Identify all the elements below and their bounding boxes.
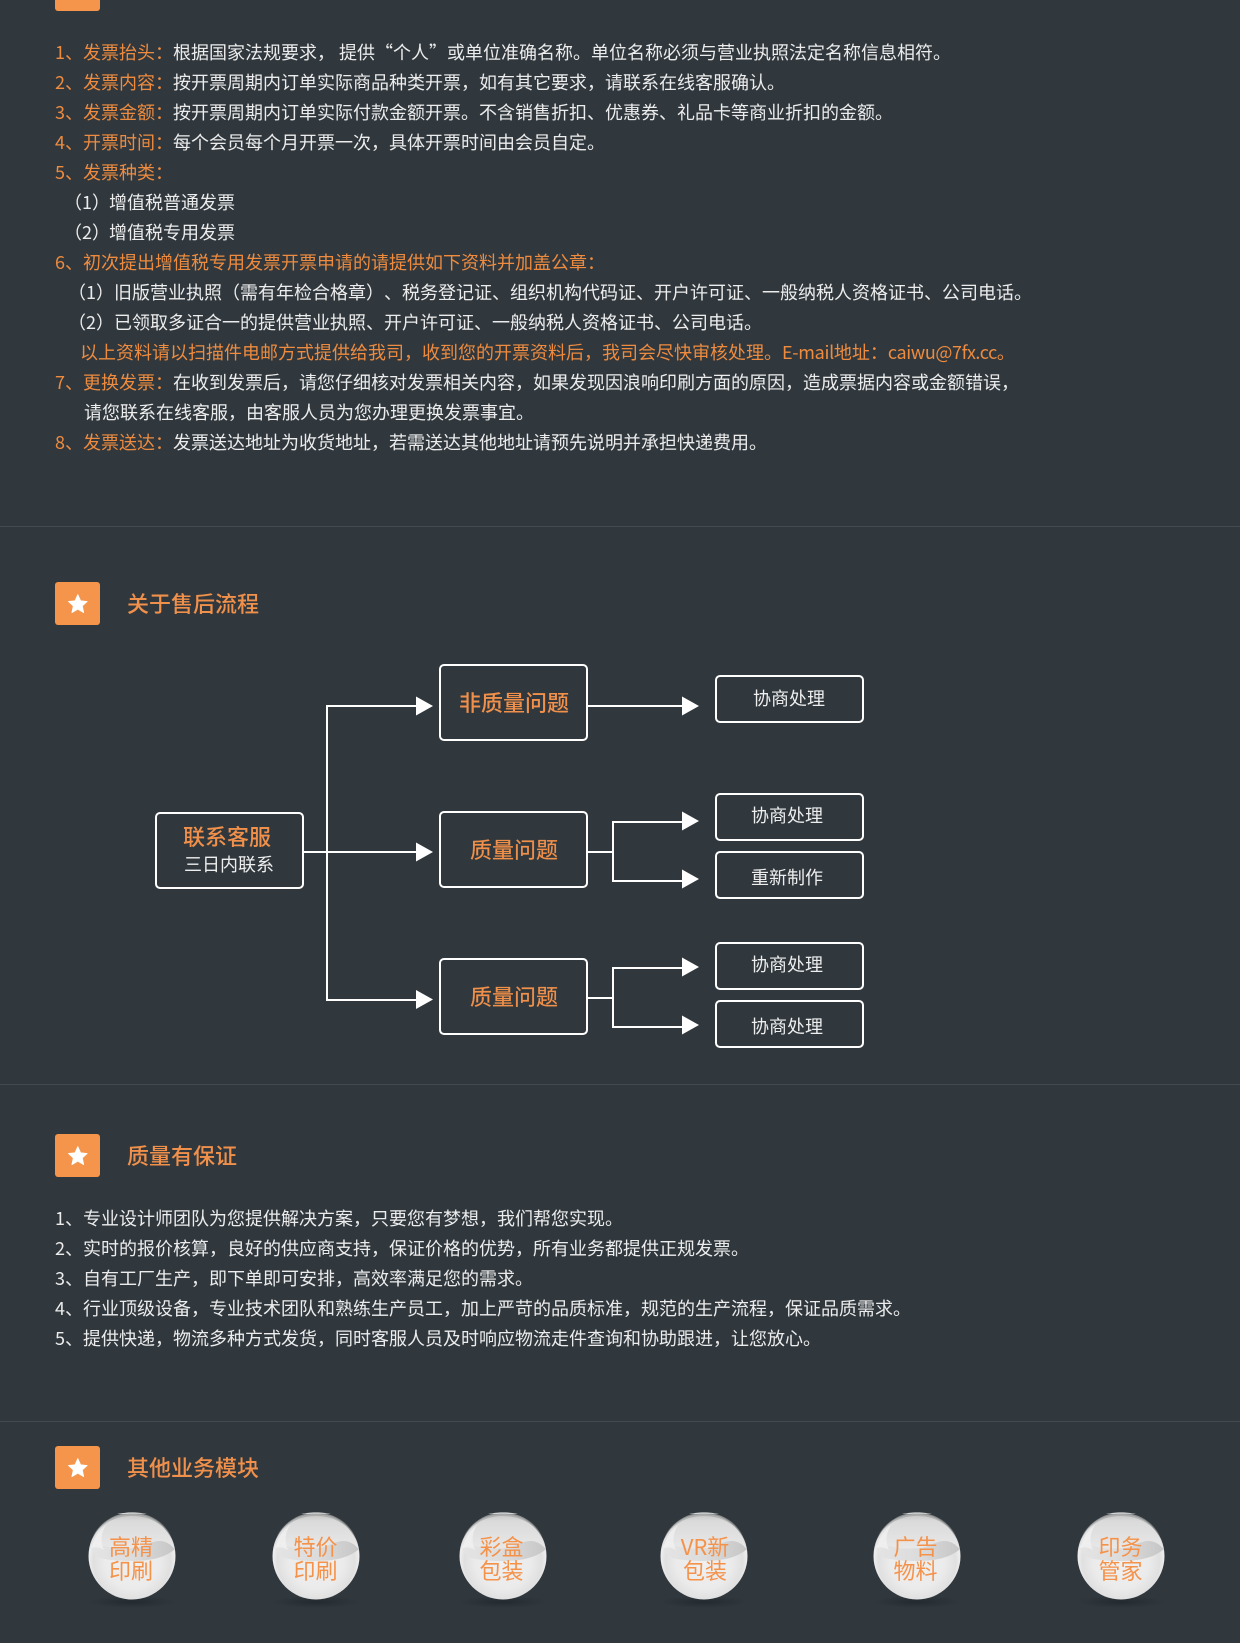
flow box: contact service <box>156 813 303 888</box>
arrow: non-quality to negotiate <box>588 696 699 716</box>
flow box: negotiate a <box>716 676 863 722</box>
icon: sphere high-precision printing <box>88 1512 176 1604</box>
text: guarantee 2: 2、实时的报价核算，良好的供应商支持，保证价格的优势，所有业务都提供正规发票。 <box>55 1235 749 1261</box>
icon: star badge <box>55 1134 100 1177</box>
flowchart: after-sales <box>155 664 864 1048</box>
text: invoice line 3: 3、发票金额：按开票周期内订单实际付款金额开票。不含销售折扣、优惠券、礼品卡等商业折扣的金额。 <box>55 99 893 125</box>
icon: sphere advertising materials: 广告 <box>893 1530 938 1562</box>
icon: sphere colour box packaging <box>460 1512 546 1604</box>
text: guarantee 4: 4、行业顶级设备，专业技术团队和熟练生产员工，加上严苛的品质标准，规范的生产流程，保证品质需求。 <box>55 1295 911 1321</box>
flow box: negotiate a: 协商处理 <box>753 685 825 711</box>
flow box: negotiate b: 协商处理 <box>751 802 823 828</box>
flow box: contact service: 联系客服 <box>183 820 271 852</box>
text: guarantee 3: 3、自有工厂生产，即下单即可安排，高效率满足您的需求。 <box>55 1265 533 1291</box>
icon: sphere special-price printing: 特价 <box>293 1530 338 1562</box>
flow box: quality issue 2: 质量问题 <box>470 980 558 1012</box>
text: invoice line 1: 1、发票抬头：根据国家法规要求， 提供“个人”或单位准确名称。单位名称必须与营业执照法定名称信息相符。 <box>55 39 951 65</box>
flow box: negotiate c <box>716 943 863 989</box>
icon: sphere print manager: 管家 <box>1098 1554 1142 1586</box>
text: material list 1: （1）旧版营业执照（需有年检合格章）、税务登记证、组织机构代码证、开户许可证、一般纳税人资格证书、公司电话。 <box>68 279 1032 305</box>
heading: after-sales process: 关于售后流程 <box>127 587 259 619</box>
arrow: quality fork <box>588 812 699 888</box>
heading: quality guarantee: 质量有保证 <box>127 1139 237 1171</box>
section: after-sales process <box>55 582 259 625</box>
icon: star badge <box>55 582 100 625</box>
icon: sphere advertising materials: 物料 <box>893 1554 938 1586</box>
text: material list 2: （2）已领取多证合一的提供营业执照、开户许可证、一般纳税人资格证书、公司电话。 <box>68 309 762 335</box>
flow box: quality issue 2 <box>440 959 587 1034</box>
icon: sphere high-precision printing: 高精 <box>109 1530 153 1562</box>
icon: sphere colour box packaging: 包装 <box>479 1554 524 1586</box>
icon: sphere VR packaging: VR新 <box>681 1530 729 1562</box>
text: invoice line 8: 8、发票送达：发票送达地址为收货地址，若需送达其他地址请预先说明并承担快递费用。 <box>55 429 767 455</box>
icon: clipped section badge <box>55 0 100 11</box>
heading: other modules: 其他业务模块 <box>127 1451 259 1483</box>
flow box: negotiate d <box>716 1001 863 1047</box>
text: invoice type 2: （2）增值税专用发票 <box>64 219 235 245</box>
flow box: negotiate b <box>716 794 863 840</box>
flow box: quality issue 1: 质量问题 <box>470 833 558 865</box>
section: quality guarantee <box>55 1134 911 1351</box>
icon: sphere special-price printing <box>272 1512 360 1604</box>
flow box: non-quality issue: 非质量问题 <box>459 686 569 718</box>
icon: star badge <box>55 1446 100 1489</box>
text: email note: 以上资料请以扫描件电邮方式提供给我司，收到您的开票资料后，我司会尽快审核处理。E-mail地址：caiwu@7fx.cc。 <box>80 339 1015 365</box>
icon: sphere special-price printing: 印刷 <box>293 1554 338 1586</box>
text: invoice line 5: 5、发票种类： <box>55 159 173 185</box>
text: invoice line 4: 4、开票时间：每个会员每个月开票一次，具体开票时间由会员自定。 <box>55 129 605 155</box>
arrow: quality fork lower <box>588 958 699 1034</box>
icon: sphere VR packaging <box>660 1512 748 1604</box>
text: invoice type 1: （1）增值税普通发票 <box>64 189 235 215</box>
text: guarantee 1: 1、专业设计师团队为您提供解决方案，只要您有梦想，我们帮您实现。 <box>55 1205 623 1231</box>
text: invoice line 7: 7、更换发票：在收到发票后，请您仔细核对发票相关内容，如果发现因浪响印刷方面的原因，造成票据内容或金额错误， <box>55 369 1019 395</box>
section: invoice notes <box>55 0 1032 455</box>
icon: sphere high-precision printing: 印刷 <box>109 1554 153 1586</box>
text: invoice line 6: 6、初次提出增值税专用发票开票申请的请提供如下资料并加盖公章： <box>55 249 605 275</box>
flow box: remake: 重新制作 <box>751 864 823 890</box>
flow box: quality issue 1 <box>440 812 587 887</box>
text: guarantee 5: 5、提供快递，物流多种方式发货，同时客服人员及时响应物流走件查询和协助跟进，让您放心。 <box>55 1325 821 1351</box>
flow box: negotiate d: 协商处理 <box>751 1013 823 1039</box>
icon: sphere colour box packaging: 彩盒 <box>479 1530 524 1562</box>
flow box: negotiate c: 协商处理 <box>751 951 823 977</box>
icon: sphere print manager <box>1078 1512 1164 1604</box>
section: other business modules <box>55 1446 1164 1604</box>
arrow: contact to quality lower <box>327 852 433 1009</box>
text: invoice line 2: 2、发票内容：按开票周期内订单实际商品种类开票，如有其它要求，请联系在线客服确认。 <box>55 69 785 95</box>
flow box: remake <box>716 852 863 898</box>
icon: sphere advertising materials <box>874 1512 960 1604</box>
flow box: contact service: 三日内联系 <box>184 851 274 877</box>
icon: sphere print manager: 印务 <box>1098 1530 1142 1562</box>
icon: sphere VR packaging: 包装 <box>683 1554 727 1586</box>
text: invoice line 7 continued: 请您联系在线客服，由客服人员为您办理更换发票事宜。 <box>84 399 534 425</box>
arrow: contact to non-quality <box>327 696 433 852</box>
arrow: contact to quality <box>304 842 433 862</box>
flow box: non-quality issue <box>440 665 587 740</box>
